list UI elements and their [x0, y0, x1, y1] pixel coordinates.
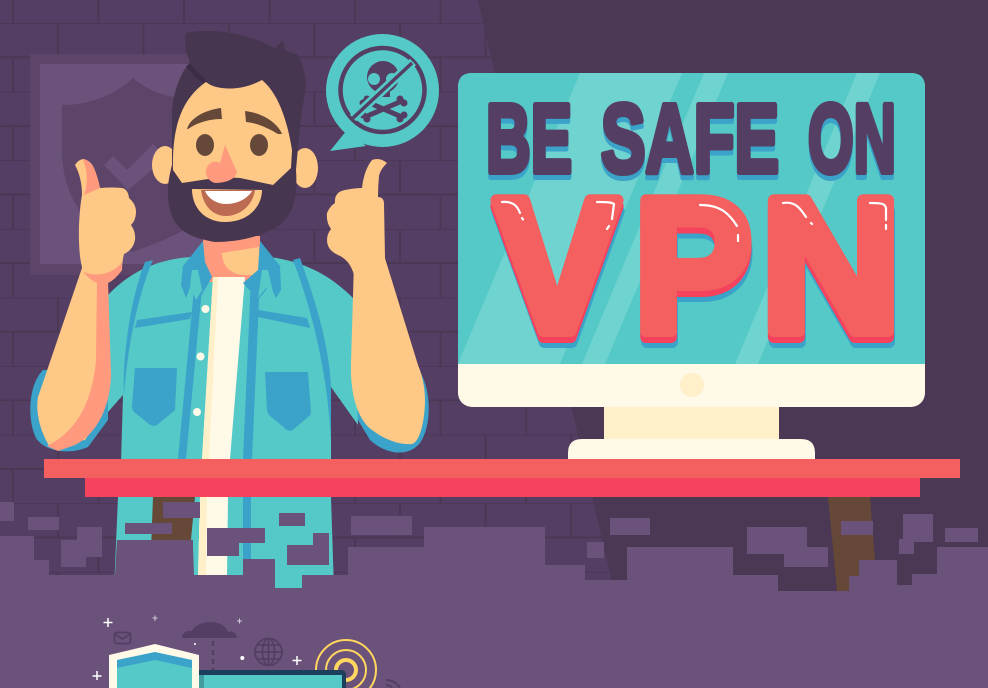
VPN red letters: V [495, 160, 619, 372]
neck [203, 236, 260, 282]
VPN red letters: P [634, 160, 752, 372]
nose [206, 145, 237, 183]
heading text: BE [486, 84, 572, 193]
power button [680, 373, 704, 397]
heading text: ON [808, 84, 896, 193]
man with thumbs up [30, 31, 429, 590]
jeans scrap over floor [275, 575, 302, 588]
heading shadow: BE [486, 89, 572, 198]
dashed connector [212, 641, 214, 670]
icon: cloud [182, 622, 237, 638]
VPN blue shadow [496, 171, 902, 383]
hair and beard [168, 31, 306, 242]
mouth [192, 189, 262, 222]
eyebrows [187, 108, 282, 134]
heading text [486, 84, 896, 193]
skull and crossbones [360, 61, 408, 122]
VPN red letters: N [761, 160, 901, 372]
left hand thumbs up [75, 159, 136, 283]
table leg right [828, 497, 875, 591]
collar [181, 241, 281, 300]
right hand thumbs up [327, 159, 387, 276]
VPN dark red depth: P [634, 166, 752, 378]
laptop [199, 670, 346, 688]
VPN dark red depth [495, 166, 901, 378]
VPN blue shadow: P [635, 171, 753, 383]
icon: concentric signal rings [316, 640, 376, 688]
VPN dark red depth: V [495, 166, 619, 378]
framed shield poster [30, 54, 205, 275]
denim shirt [108, 257, 358, 462]
dark shadow wall [478, 0, 988, 600]
screen reflections [458, 73, 880, 364]
network illustration [92, 616, 400, 688]
jeans [114, 497, 334, 590]
sleeves [30, 370, 108, 451]
white undershirt [202, 277, 245, 459]
monitor base [568, 439, 815, 460]
ears [152, 146, 318, 188]
table [44, 459, 960, 497]
shirt buttons [193, 305, 210, 416]
monitor screen [458, 73, 925, 364]
icon: globe [255, 638, 282, 666]
letter highlights [502, 202, 886, 241]
eyes [196, 134, 268, 156]
right arm [351, 255, 425, 444]
icon: envelope [114, 632, 130, 644]
VPN blue shadow: N [762, 171, 902, 383]
monitor stand [604, 405, 779, 441]
icon: wifi arcs [386, 680, 400, 688]
heading: VPN [495, 160, 902, 383]
heading shadow [486, 89, 896, 198]
left arm [37, 262, 111, 451]
face [173, 80, 292, 185]
monitor body [458, 73, 925, 407]
VPN dark red depth: N [761, 166, 901, 378]
heading: BE SAFE ON [486, 84, 896, 198]
sparkles [92, 616, 302, 680]
VPN red letters [495, 160, 901, 372]
crumbling brick floor [0, 502, 988, 688]
speech bubble: no pirates [326, 34, 439, 151]
shield [109, 644, 199, 688]
heading text: SAFE [601, 84, 779, 193]
heading shadow: SAFE [601, 89, 779, 198]
heading shadow: ON [808, 89, 896, 198]
computer monitor [458, 73, 925, 460]
VPN blue shadow: V [496, 171, 620, 383]
